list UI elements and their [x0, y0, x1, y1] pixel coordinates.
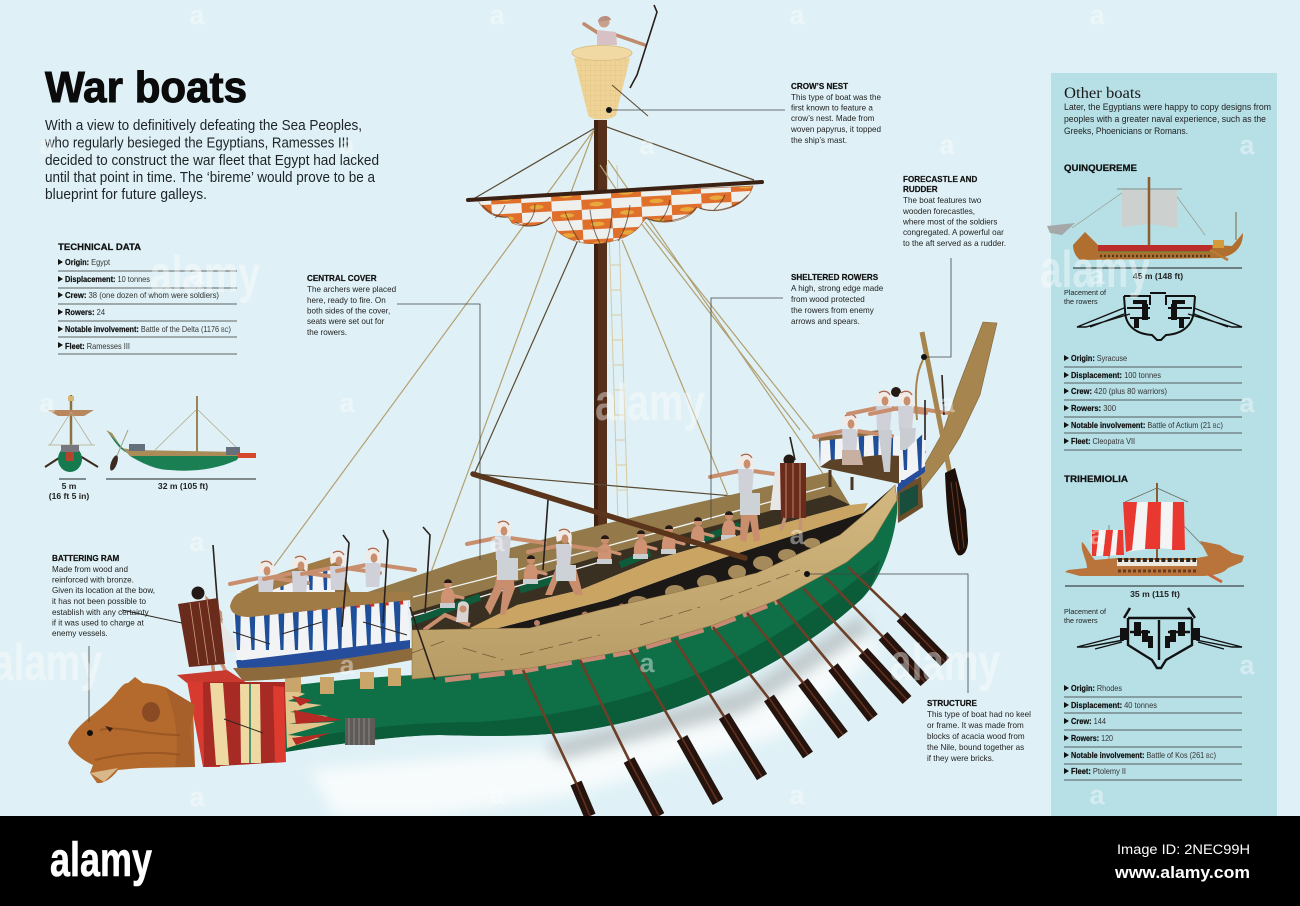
trihemiolia data: [1064, 684, 1242, 780]
watermark letters: a: [939, 130, 955, 160]
callout: central cover: The archers were placed: [307, 285, 396, 294]
watermark letters: a: [1089, 0, 1105, 30]
illustration: war boat: [68, 5, 997, 816]
callout: forecastle and rudder: wooden forecastles,: [902, 207, 975, 216]
trihemiolia data: Fleet: Ptolemy II: [1071, 767, 1126, 776]
technical data: TECHNICAL DATA: [58, 242, 141, 253]
small boat dimensions: [49, 479, 256, 501]
watermark letters: a: [1239, 130, 1255, 160]
watermark letters: a: [789, 520, 805, 550]
callout: sheltered rowers: A high, strong edge made: [791, 284, 884, 293]
callout: forecastle and rudder: where most of the soldiers: [902, 218, 997, 226]
quinquereme illustration: 45 m (148 ft): [1133, 271, 1183, 281]
callout: battering ram: reinforced with bronze.: [52, 576, 134, 584]
watermark letters: a: [189, 527, 205, 557]
watermark letters: a: [789, 0, 805, 30]
rudder oar: [916, 332, 968, 555]
watermark letters: a: [1239, 388, 1255, 418]
trihemiolia heading: TRIHEMIOLIA: [1064, 474, 1128, 485]
technical data: Displacement: 10 tonnes: [65, 275, 150, 284]
lower yard spar: [473, 474, 745, 558]
callout: forecastle and rudder: to the aft served as a rudder.: [903, 239, 1006, 248]
callout: crow's nest: woven papyrus, it topped: [790, 125, 881, 134]
gap beneath deck: [483, 485, 895, 632]
panel: other boats: [1051, 73, 1277, 816]
intro text: [44, 118, 379, 203]
callout: sheltered rowers: SHELTERED ROWERS: [791, 273, 879, 282]
callout: battering ram: it has not been possible to: [52, 597, 147, 606]
other boats intro: peoples with a greater naval experience, such as the: [1064, 114, 1266, 124]
shielded soldier: [178, 586, 235, 684]
back bulwark: [353, 472, 850, 632]
ram and shield arrows: [122, 610, 263, 733]
image id: Image ID: 2NEC99H: [1117, 842, 1250, 857]
callout: battering ram: establish with any certainty: [52, 608, 150, 617]
crow's nest: [572, 46, 648, 120]
forecastle front: [230, 592, 412, 694]
callout: central cover: both sides of the cover,: [307, 306, 390, 316]
callout: structure: the Nile, bound together as: [927, 743, 1024, 752]
watermark letters: a: [339, 130, 355, 160]
watermark letters: a: [639, 648, 655, 678]
quinquereme rowers section: the rowers: [1064, 297, 1098, 306]
trihemiolia rowers section: the rowers: [1064, 616, 1098, 625]
technical data: Fleet: Ramesses III: [65, 342, 130, 351]
watermark words: [0, 241, 1150, 692]
watermark letters: a: [1089, 260, 1105, 290]
intro text: With a view to definitively defeating the Sea Peoples,: [45, 118, 362, 134]
archers on forecastle: [230, 547, 415, 600]
callout: sheltered rowers: the rowers from enemy: [791, 306, 875, 315]
other boats intro: [1064, 102, 1271, 136]
quinquereme heading: QUINQUEREME: [1064, 163, 1138, 174]
archer in crow's nest: [584, 5, 657, 88]
bow decoration: [285, 687, 335, 748]
quinquereme data: Notable involvement: Battle of Actium (21 BC): [1071, 421, 1223, 430]
lion-head battering ram: [68, 670, 286, 783]
rower seats: [412, 525, 740, 622]
watermark letters: a: [939, 388, 955, 418]
callout: battering ram: if it was used to charge at: [52, 618, 145, 628]
callout: forecastle and rudder: congregated. A powerful oar: [903, 228, 1004, 237]
quinquereme data: Crew: 420 (plus 80 warriors): [1071, 387, 1167, 396]
callout: central cover: the rowers.: [307, 328, 347, 337]
small boat dimensions: 32 m (105 ft): [158, 481, 208, 491]
wood strake: [412, 485, 897, 679]
callout: forecastle and rudder: [902, 175, 1006, 360]
callout: structure: blocks of acacia wood from: [927, 732, 1025, 741]
quinquereme illustration: [1047, 177, 1243, 281]
trihemiolia data: Rowers: 120: [1071, 734, 1113, 743]
callout: battering ram: enemy vessels.: [52, 629, 108, 638]
trihemiolia data: Notable involvement: Battle of Kos (261 BC): [1071, 751, 1216, 760]
shields and heads under deck: [534, 538, 820, 626]
watermark letters: a: [1089, 780, 1105, 810]
other boats intro: Greeks, Phoenicians or Romans.: [1064, 126, 1188, 136]
callout: central cover: [307, 274, 480, 560]
sternpost: [918, 322, 997, 490]
small boat dimensions: 5 m: [62, 481, 77, 491]
quinquereme data: Rowers: 300: [1071, 404, 1116, 413]
callout: forecastle and rudder: The boat features two: [903, 196, 982, 205]
technical data: [58, 242, 237, 354]
quinquereme rowers section: [1064, 288, 1242, 340]
trihemiolia data: Origin: Rhodes: [1071, 684, 1122, 693]
callout: battering ram: [52, 554, 155, 722]
bows on forecastle: [213, 527, 435, 680]
callout: sheltered rowers: [711, 273, 884, 520]
callout: battering ram: BATTERING RAM: [52, 554, 120, 563]
technical data: Origin: Egypt: [65, 258, 111, 267]
watermark letters: a: [639, 130, 655, 160]
forecastle back wall: [240, 555, 353, 612]
green hull: [283, 500, 897, 752]
watermark words: alamy: [1040, 241, 1150, 299]
quinquereme data: [1064, 354, 1242, 450]
callout: sheltered rowers: from wood protected: [791, 295, 865, 304]
watermark letters: a: [189, 0, 205, 30]
callout: crow's nest: the ship’s mast.: [791, 136, 847, 145]
footer bar: [0, 816, 1300, 906]
callout: structure: or frame. It was made from: [927, 721, 1024, 730]
rigging ropes: [274, 127, 852, 575]
soldiers on deck: [467, 437, 806, 615]
callout: structure: [804, 571, 1031, 763]
watermark words: alamy: [150, 246, 260, 304]
watermark letters: a: [489, 0, 505, 30]
website: www.alamy.com: [1114, 863, 1250, 882]
watermark letters: a: [189, 260, 205, 290]
callout: battering ram: Made from wood and: [52, 565, 128, 574]
watermark letters: a: [1089, 520, 1105, 550]
watermark words: alamy: [890, 634, 1000, 692]
trihemiolia rowers section: Placement of: [1064, 607, 1106, 616]
lower rowers showing through gap: [445, 602, 777, 680]
oars: [523, 567, 945, 816]
title: War boats: [45, 63, 247, 112]
callout: structure: STRUCTURE: [927, 699, 978, 708]
trihemiolia illustration: [1065, 483, 1244, 599]
callout: crow's nest: This type of boat was the: [791, 93, 881, 102]
watermark letters: a: [339, 650, 355, 680]
technical data: Rowers: 24: [65, 308, 105, 317]
callout: structure: This type of boat had no keel: [927, 710, 1031, 719]
small boat: side view: [106, 396, 256, 472]
intro text: blueprint for future galleys.: [45, 187, 207, 203]
other boats heading: Other boats: [1064, 85, 1141, 102]
alamy logo: alamy: [50, 834, 152, 887]
callout: sheltered rowers: arrows and spears.: [791, 317, 860, 326]
callout: central cover: seats were set out for: [307, 317, 385, 326]
mast and ladder: [594, 120, 628, 590]
quinquereme data: Displacement: 100 tonnes: [1071, 371, 1161, 380]
trihemiolia data: Displacement: 40 tonnes: [1071, 701, 1157, 710]
callout: battering ram: Given its location at the bow,: [52, 586, 155, 595]
watermark letters: a: [489, 780, 505, 810]
callout: forecastle and rudder: RUDDER: [903, 185, 938, 194]
watermark words: alamy: [595, 374, 705, 432]
callout: crow's nest: crow’s nest. Made from: [791, 114, 875, 123]
small boat dimensions: (16 ft 5 in): [49, 491, 89, 501]
main deck: [470, 503, 868, 632]
yard with furled sail: [468, 182, 762, 244]
quinquereme rowers section: Placement of: [1064, 288, 1106, 297]
technical data: Crew: 38 (one dozen of whom were soldiers): [65, 291, 219, 300]
watermark letters: a: [789, 780, 805, 810]
intro text: until that point in time. The ‘bireme’ would prove to be a: [45, 170, 375, 186]
rowers on upper row: [424, 511, 744, 630]
watermark letters: a: [489, 527, 505, 557]
small boat: front view: [45, 395, 98, 472]
intro text: decided to construct the war fleet that Egypt had lacked: [45, 153, 379, 169]
watermark letters: a: [189, 782, 205, 812]
callout: central cover: here, ready to fire. On: [307, 296, 386, 305]
hull shadow: [310, 615, 880, 816]
watermark letters: a: [339, 388, 355, 418]
callout: central cover: CENTRAL COVER: [307, 274, 377, 283]
other boats intro: Later, the Egyptians were happy to copy designs from: [1064, 102, 1271, 112]
callout: crow's nest: [606, 82, 881, 145]
trihemiolia rowers section: [1064, 607, 1242, 668]
watermark letters: a: [39, 388, 55, 418]
quinquereme data: Origin: Syracuse: [1071, 354, 1127, 363]
callout: structure: if they were bricks.: [927, 754, 994, 763]
trihemiolia illustration: 35 m (115 ft): [1130, 589, 1180, 599]
bulwark lower shaded band: [412, 495, 850, 632]
bulwark white stripes: [410, 487, 825, 617]
callout: crow's nest: CROW’S NEST: [791, 82, 848, 91]
intro text: who regularly besieged the Egyptians, Ramesses III: [44, 136, 349, 152]
technical data: Notable involvement: Battle of the Delta (1176 BC): [65, 325, 231, 334]
callout: forecastle and rudder: FORECASTLE AND: [903, 175, 977, 184]
callout: crow's nest: first known to feature a: [791, 104, 873, 112]
trihemiolia data: Crew: 144: [1071, 717, 1106, 726]
watermark letters: a: [1239, 650, 1255, 680]
quinquereme data: Fleet: Cleopatra VII: [1071, 437, 1135, 446]
stern castle: [814, 387, 948, 523]
watermark letters: a: [39, 130, 55, 160]
